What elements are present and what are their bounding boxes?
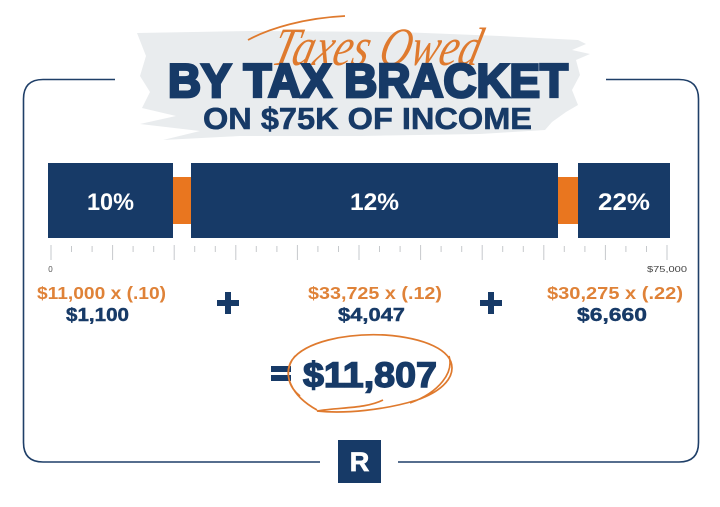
calculation: 22% bracket [547,283,683,325]
brand logo [338,440,381,483]
bar: 22% bracket [578,163,670,238]
plus sign [480,292,502,314]
bar: 12% bracket: 12% [350,189,399,216]
total [271,335,452,412]
main heading: BY TAX BRACKET [168,54,568,107]
bar: 22% bracket: 22% [598,189,650,216]
bar: 12% bracket [191,163,558,238]
script heading: Taxes Owed [267,17,489,77]
calculation: 12% bracket [308,283,442,325]
calculation: 22% bracket: $30,275 x (.22) [547,283,683,303]
scale ticks [51,245,667,260]
brush stroke background [137,31,590,140]
orange connector: 10% to 12% [173,177,191,224]
calculation: 12% bracket: $33,725 x (.12) [308,283,442,303]
bar: 10% bracket: 10% [87,189,134,216]
total amount: $11,807 [303,356,437,395]
scale end label: $75,000 [647,264,687,274]
calculation: 12% bracket: $4,047 [338,305,405,325]
calculation: 10% bracket [37,283,166,325]
brand logo: R [350,447,369,477]
plus sign [217,292,239,314]
bar: 10% bracket [48,163,173,238]
bracket bar chart [48,163,670,238]
orange connector: 12% to 22% [558,177,578,224]
income scale [48,245,687,274]
calculation: 10% bracket: $1,100 [66,305,129,325]
title block [137,16,590,140]
calculation: 22% bracket: $6,660 [577,305,647,325]
calculation: 10% bracket: $11,000 x (.10) [37,283,166,303]
subheading: ON $75K OF INCOME [203,102,532,136]
hand-drawn circle [288,335,452,412]
rounded frame [24,80,698,462]
scale start label: 0 [48,265,53,274]
equals sign [271,366,291,381]
